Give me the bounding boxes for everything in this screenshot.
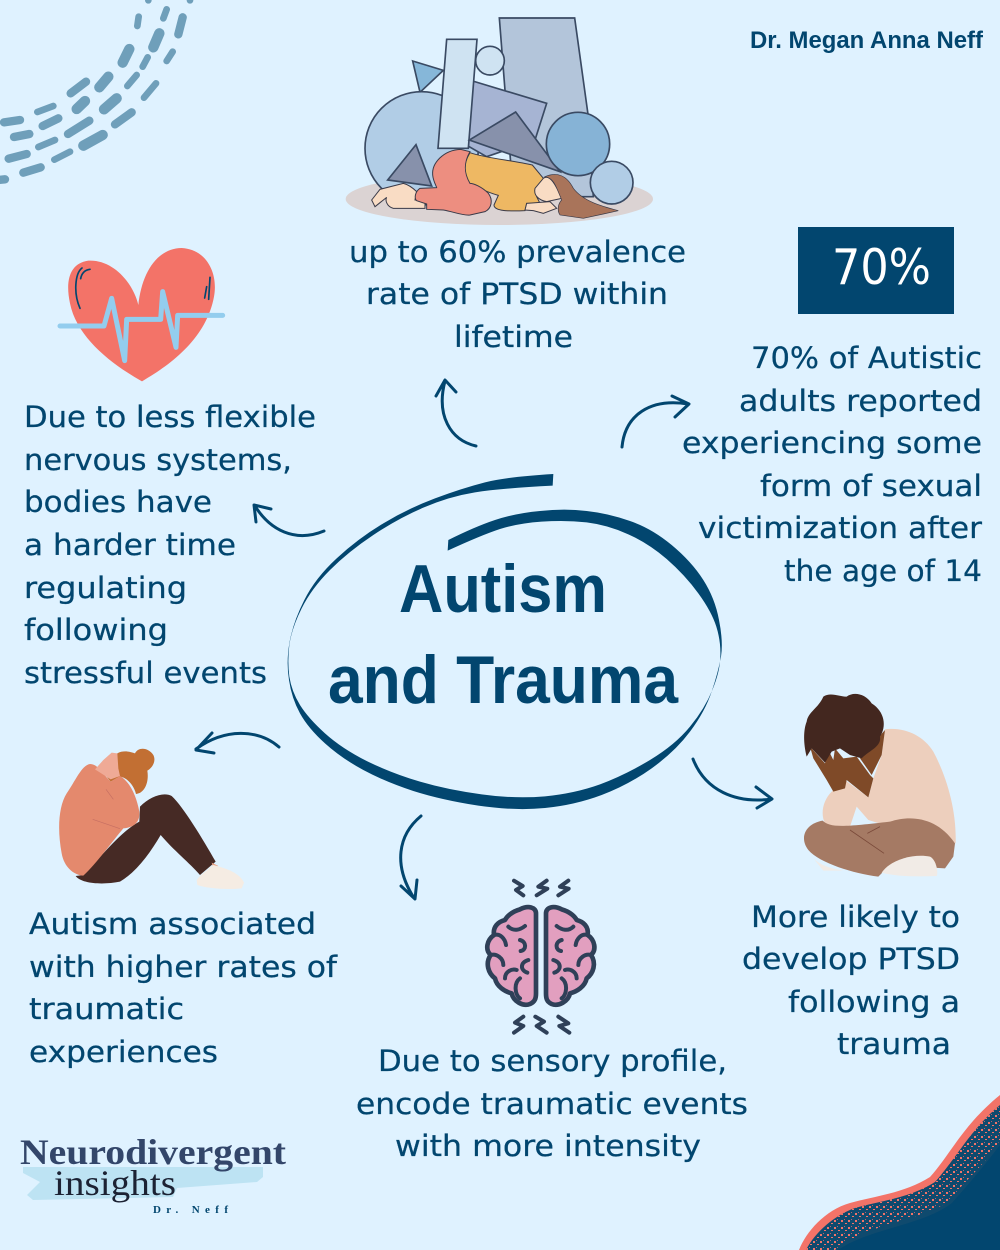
statement: nervous systems: bodies have — [24, 485, 212, 519]
statement: PTSD prevalence — [349, 235, 686, 354]
illustration: person holding head — [804, 694, 956, 877]
illustration: woman under shapes — [346, 18, 653, 225]
statement: develop PTSD: following a — [788, 985, 960, 1019]
arrow: to person right — [693, 759, 772, 808]
statement: nervous systems — [24, 400, 316, 690]
statement: sensory profile: encode traumatic events — [356, 1087, 748, 1121]
statement: PTSD prevalence: up to 60% prevalence — [349, 235, 686, 269]
arrow: to right stat — [622, 396, 689, 447]
statement: sexual victimization — [682, 341, 982, 588]
logo: Dr. Neff — [153, 1204, 228, 1216]
statement: sexual victimization: adults reported — [739, 384, 982, 418]
statement: higher rates: Autism associated — [29, 907, 316, 941]
icon: heart with pulse — [60, 248, 223, 381]
decorative corner blob — [799, 1095, 1000, 1250]
logo: Neurodivergent — [20, 1132, 286, 1172]
statement: nervous systems: regulating — [24, 571, 187, 605]
central hand-drawn ring — [288, 474, 722, 809]
statement: sensory profile: with more intensity — [395, 1129, 701, 1163]
stat box: 70% — [798, 227, 954, 314]
statement: higher rates — [29, 907, 338, 1069]
statement: nervous systems: following — [24, 613, 168, 647]
statement: higher rates: experiences — [29, 1035, 218, 1069]
arrow: to brain — [401, 816, 421, 899]
statement: sexual victimization: victimization after — [698, 511, 982, 545]
statement: develop PTSD: More likely to — [751, 900, 960, 934]
statement: sexual victimization: 70% of Autistic — [751, 341, 982, 375]
statement: sensory profile — [356, 1044, 748, 1163]
statement: nervous systems: stressful events — [24, 656, 267, 690]
statement: PTSD prevalence: lifetime — [454, 320, 573, 354]
statement: sexual victimization: experiencing some — [682, 426, 982, 460]
decorative dashes top-left — [0, 0, 190, 180]
arrow: to top — [436, 380, 476, 446]
statement: nervous systems: nervous systems, — [24, 443, 292, 477]
arrow: to seated person — [196, 733, 279, 753]
statement: higher rates: traumatic — [29, 992, 184, 1026]
title: and Trauma — [328, 642, 679, 718]
arrow: to heart — [254, 505, 324, 536]
illustration: seated person head down — [59, 749, 244, 889]
stat box: 70%: 70% — [832, 239, 931, 296]
statement: develop PTSD: trauma — [837, 1027, 951, 1061]
icon: brain — [487, 881, 594, 1033]
statement: develop PTSD: develop PTSD — [742, 942, 960, 976]
logo: insights — [54, 1163, 176, 1203]
logo — [20, 1132, 286, 1216]
statement: sensory profile: Due to sensory profile, — [378, 1044, 727, 1078]
title: Autism — [399, 551, 607, 627]
statement: sexual victimization: form of sexual — [760, 469, 982, 503]
title — [328, 551, 679, 718]
author name: Dr. Megan Anna Neff — [750, 27, 984, 54]
statement: develop PTSD — [742, 900, 960, 1061]
statement: higher rates: with higher rates of — [29, 950, 338, 984]
statement: nervous systems: a harder time — [24, 528, 236, 562]
statement: sexual victimization: the age of 14 — [784, 554, 982, 588]
statement: nervous systems: Due to less flexible — [24, 400, 316, 434]
statement: PTSD prevalence: rate of PTSD within — [366, 277, 668, 311]
